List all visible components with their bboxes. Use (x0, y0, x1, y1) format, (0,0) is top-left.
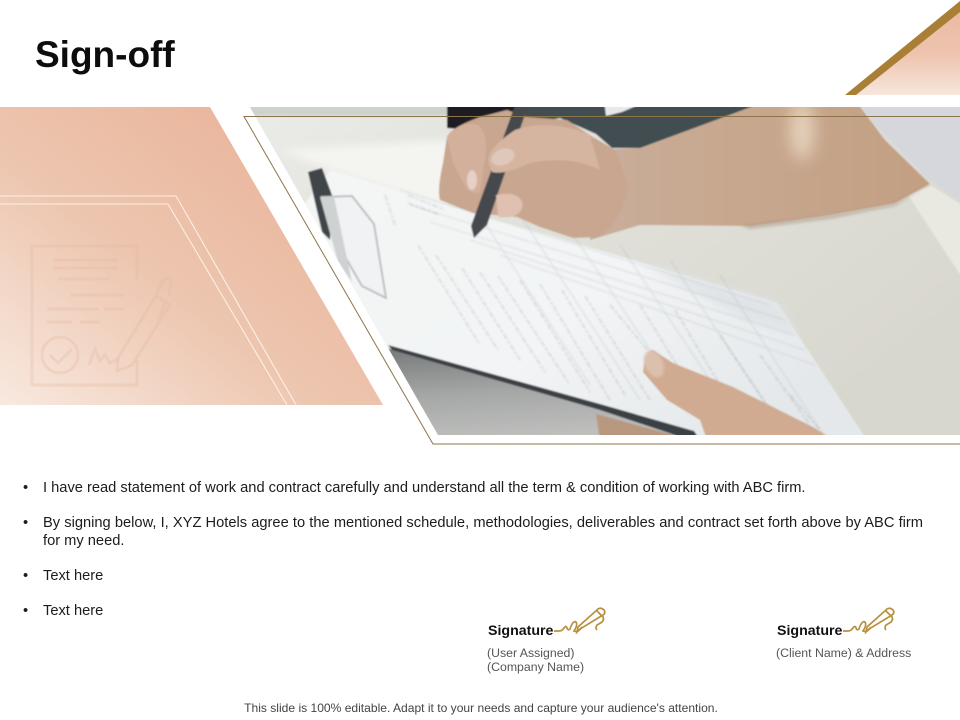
icon: pen signature (554, 607, 606, 634)
dark tablet behind arm (512, 107, 754, 149)
signature label client: Signature (777, 623, 842, 639)
form table lines (400, 190, 820, 430)
arm (590, 100, 930, 240)
pen (470, 107, 525, 238)
sub-label user: (Company Name) (487, 660, 584, 674)
bullet 2: By signing below, I, XYZ Hotels agree to the mentioned schedule, methodologies, deliverables and contract set forth above by ABC firm for my need. (43, 515, 923, 549)
signature label: Signature (488, 623, 553, 639)
panel: top-right corner accent (845, 1, 960, 95)
sleeve (924, 143, 960, 200)
bullet 1: I have read statement of work and contract carefully and understand all the term & condition of working with ABC firm. (43, 480, 806, 496)
gold outline around photo (244, 116, 960, 444)
title: Sign-off (35, 34, 175, 75)
signature block: user (487, 607, 606, 674)
table highlight (296, 140, 448, 204)
clipboard dark edge (388, 345, 700, 440)
bullet 4: • (23, 603, 28, 619)
bullet 2: • (23, 515, 28, 531)
paper (300, 170, 867, 440)
photo: hand signing a clipboard form (230, 95, 960, 445)
upper hand (439, 110, 628, 238)
icon: faded document with pen (32, 246, 171, 385)
graphic layer: panels and photo (0, 1, 960, 444)
footer note: This slide is 100% editable. Adapt it to your needs and capture your audience's attention. (244, 701, 718, 715)
metal clip (308, 168, 332, 240)
bullet 3: • (23, 568, 28, 584)
bullet 3: Text here (43, 568, 103, 584)
sub-label user (487, 646, 584, 674)
icon: pen signature client (843, 607, 895, 634)
bullet 4: Text here (43, 603, 103, 619)
area below clipboard (388, 348, 674, 435)
lower-left skin under clipboard (596, 414, 676, 435)
signature block: client (776, 607, 911, 660)
lower hand (643, 350, 834, 440)
bullet list (23, 480, 923, 619)
sub-label user: (User Assigned) (487, 646, 574, 660)
panel: peach parallelogram (0, 107, 383, 405)
sub-label client: (Client Name) & Address (776, 646, 911, 660)
bullet 1: • (23, 480, 28, 496)
thumb (488, 125, 600, 173)
